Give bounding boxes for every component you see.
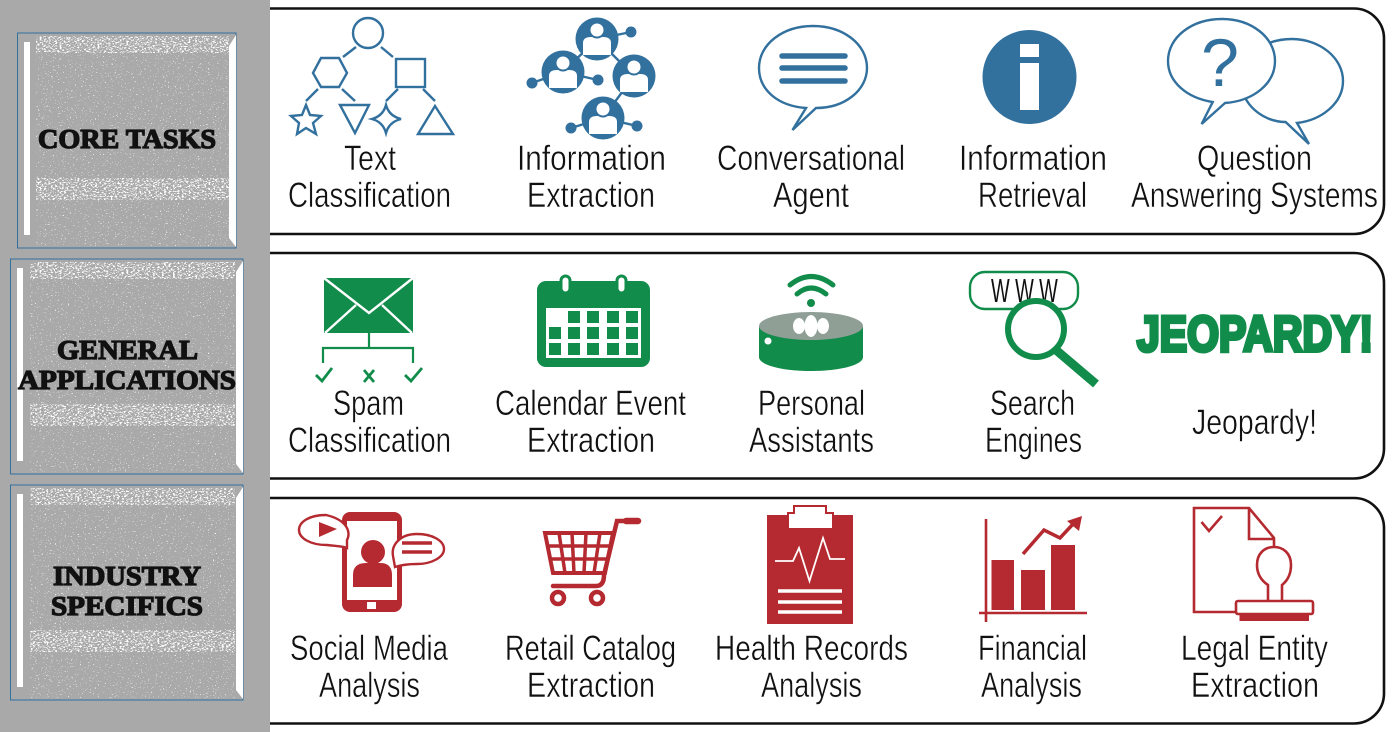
label: question answering systems: Question bbox=[1197, 139, 1312, 178]
heading: general applications: APPLICATIONS bbox=[18, 365, 236, 395]
label: personal assistants: Personal bbox=[758, 384, 865, 423]
heading: industry specifics bbox=[51, 561, 203, 621]
label: retail catalog extraction: Retail Catalog bbox=[505, 629, 676, 668]
label: text classification: Classification bbox=[288, 176, 451, 215]
panel: general applications row bbox=[230, 253, 1384, 478]
label: spam classification: Spam bbox=[333, 384, 404, 423]
label: information retrieval: Information bbox=[959, 139, 1107, 178]
label: retail catalog extraction bbox=[505, 629, 676, 705]
label: personal assistants: Assistants bbox=[749, 421, 874, 460]
label: spam classification bbox=[288, 384, 451, 460]
label: jeopardy: Jeopardy! bbox=[1192, 403, 1317, 442]
icon: search magnifier bbox=[970, 272, 1096, 384]
label: spam classification: Classification bbox=[288, 421, 451, 460]
label: information extraction: Extraction bbox=[527, 176, 655, 215]
label: health records analysis: Health Records bbox=[715, 629, 908, 668]
label: personal assistants bbox=[749, 384, 874, 460]
label: legal entity extraction: Legal Entity bbox=[1181, 629, 1328, 668]
icon: conversational speech bubble bbox=[759, 26, 867, 130]
label: information extraction: Information bbox=[517, 139, 666, 178]
icon: question bubbles bbox=[1168, 19, 1343, 144]
icon: smart speaker bbox=[759, 276, 863, 371]
heading: industry specifics: INDUSTRY bbox=[53, 561, 201, 591]
label: calendar event extraction: Extraction bbox=[527, 421, 655, 460]
chart: financial bars with arrow bbox=[979, 516, 1087, 622]
label: search engines: Engines bbox=[985, 421, 1082, 460]
heading: core tasks: CORE TASKS bbox=[38, 124, 216, 154]
icon: spam envelope bbox=[316, 278, 422, 382]
label: information extraction bbox=[517, 139, 666, 215]
label: information retrieval: Retrieval bbox=[978, 176, 1087, 215]
label: text classification: Text bbox=[344, 139, 396, 178]
label: financial analysis bbox=[978, 629, 1087, 705]
icon: shopping cart bbox=[545, 521, 638, 604]
panel: core tasks row bbox=[230, 8, 1384, 234]
panel: industry specifics row bbox=[230, 498, 1384, 724]
label: social media analysis: Analysis bbox=[319, 666, 420, 705]
label: conversational agent: Agent bbox=[773, 176, 849, 215]
icon: information circle bbox=[982, 30, 1076, 124]
icon: social media phone bbox=[299, 512, 444, 612]
label: search engines bbox=[985, 384, 1082, 460]
label: retail catalog extraction: Extraction bbox=[527, 666, 655, 705]
label: legal entity extraction bbox=[1181, 629, 1328, 705]
label: information retrieval bbox=[959, 139, 1107, 215]
label: text classification bbox=[288, 139, 451, 215]
label: calendar event extraction: Calendar Event bbox=[495, 384, 686, 423]
box: core tasks bbox=[18, 33, 236, 248]
icon: calendar bbox=[537, 276, 650, 367]
heading: industry specifics: SPECIFICS bbox=[51, 591, 203, 621]
icon: search magnifier: WWW bbox=[991, 272, 1063, 309]
label: conversational agent: Conversational bbox=[717, 139, 905, 178]
gray sidebar bbox=[0, 0, 270, 732]
label: health records analysis bbox=[715, 629, 908, 705]
heading: general applications: GENERAL bbox=[57, 335, 198, 365]
icon: information extraction network bbox=[526, 18, 656, 140]
label: legal entity extraction: Extraction bbox=[1191, 666, 1319, 705]
label: social media analysis: Social Media bbox=[290, 629, 448, 668]
label: calendar event extraction bbox=[495, 384, 686, 460]
label: financial analysis: Financial bbox=[978, 629, 1087, 668]
label: financial analysis: Analysis bbox=[981, 666, 1082, 705]
box: general applications bbox=[10, 259, 243, 474]
label: conversational agent bbox=[717, 139, 905, 215]
icon: health record clipboard bbox=[767, 506, 853, 624]
icon: classification tree bbox=[291, 18, 453, 134]
label: health records analysis: Analysis bbox=[761, 666, 862, 705]
box: industry specifics bbox=[10, 485, 243, 700]
label: social media analysis bbox=[290, 629, 448, 705]
label: question answering systems bbox=[1131, 139, 1378, 215]
icon: legal document and stamp bbox=[1194, 508, 1313, 621]
heading: general applications bbox=[18, 335, 236, 395]
icon: question bubbles: ? bbox=[1201, 25, 1239, 101]
label: search engines: Search bbox=[990, 384, 1075, 423]
